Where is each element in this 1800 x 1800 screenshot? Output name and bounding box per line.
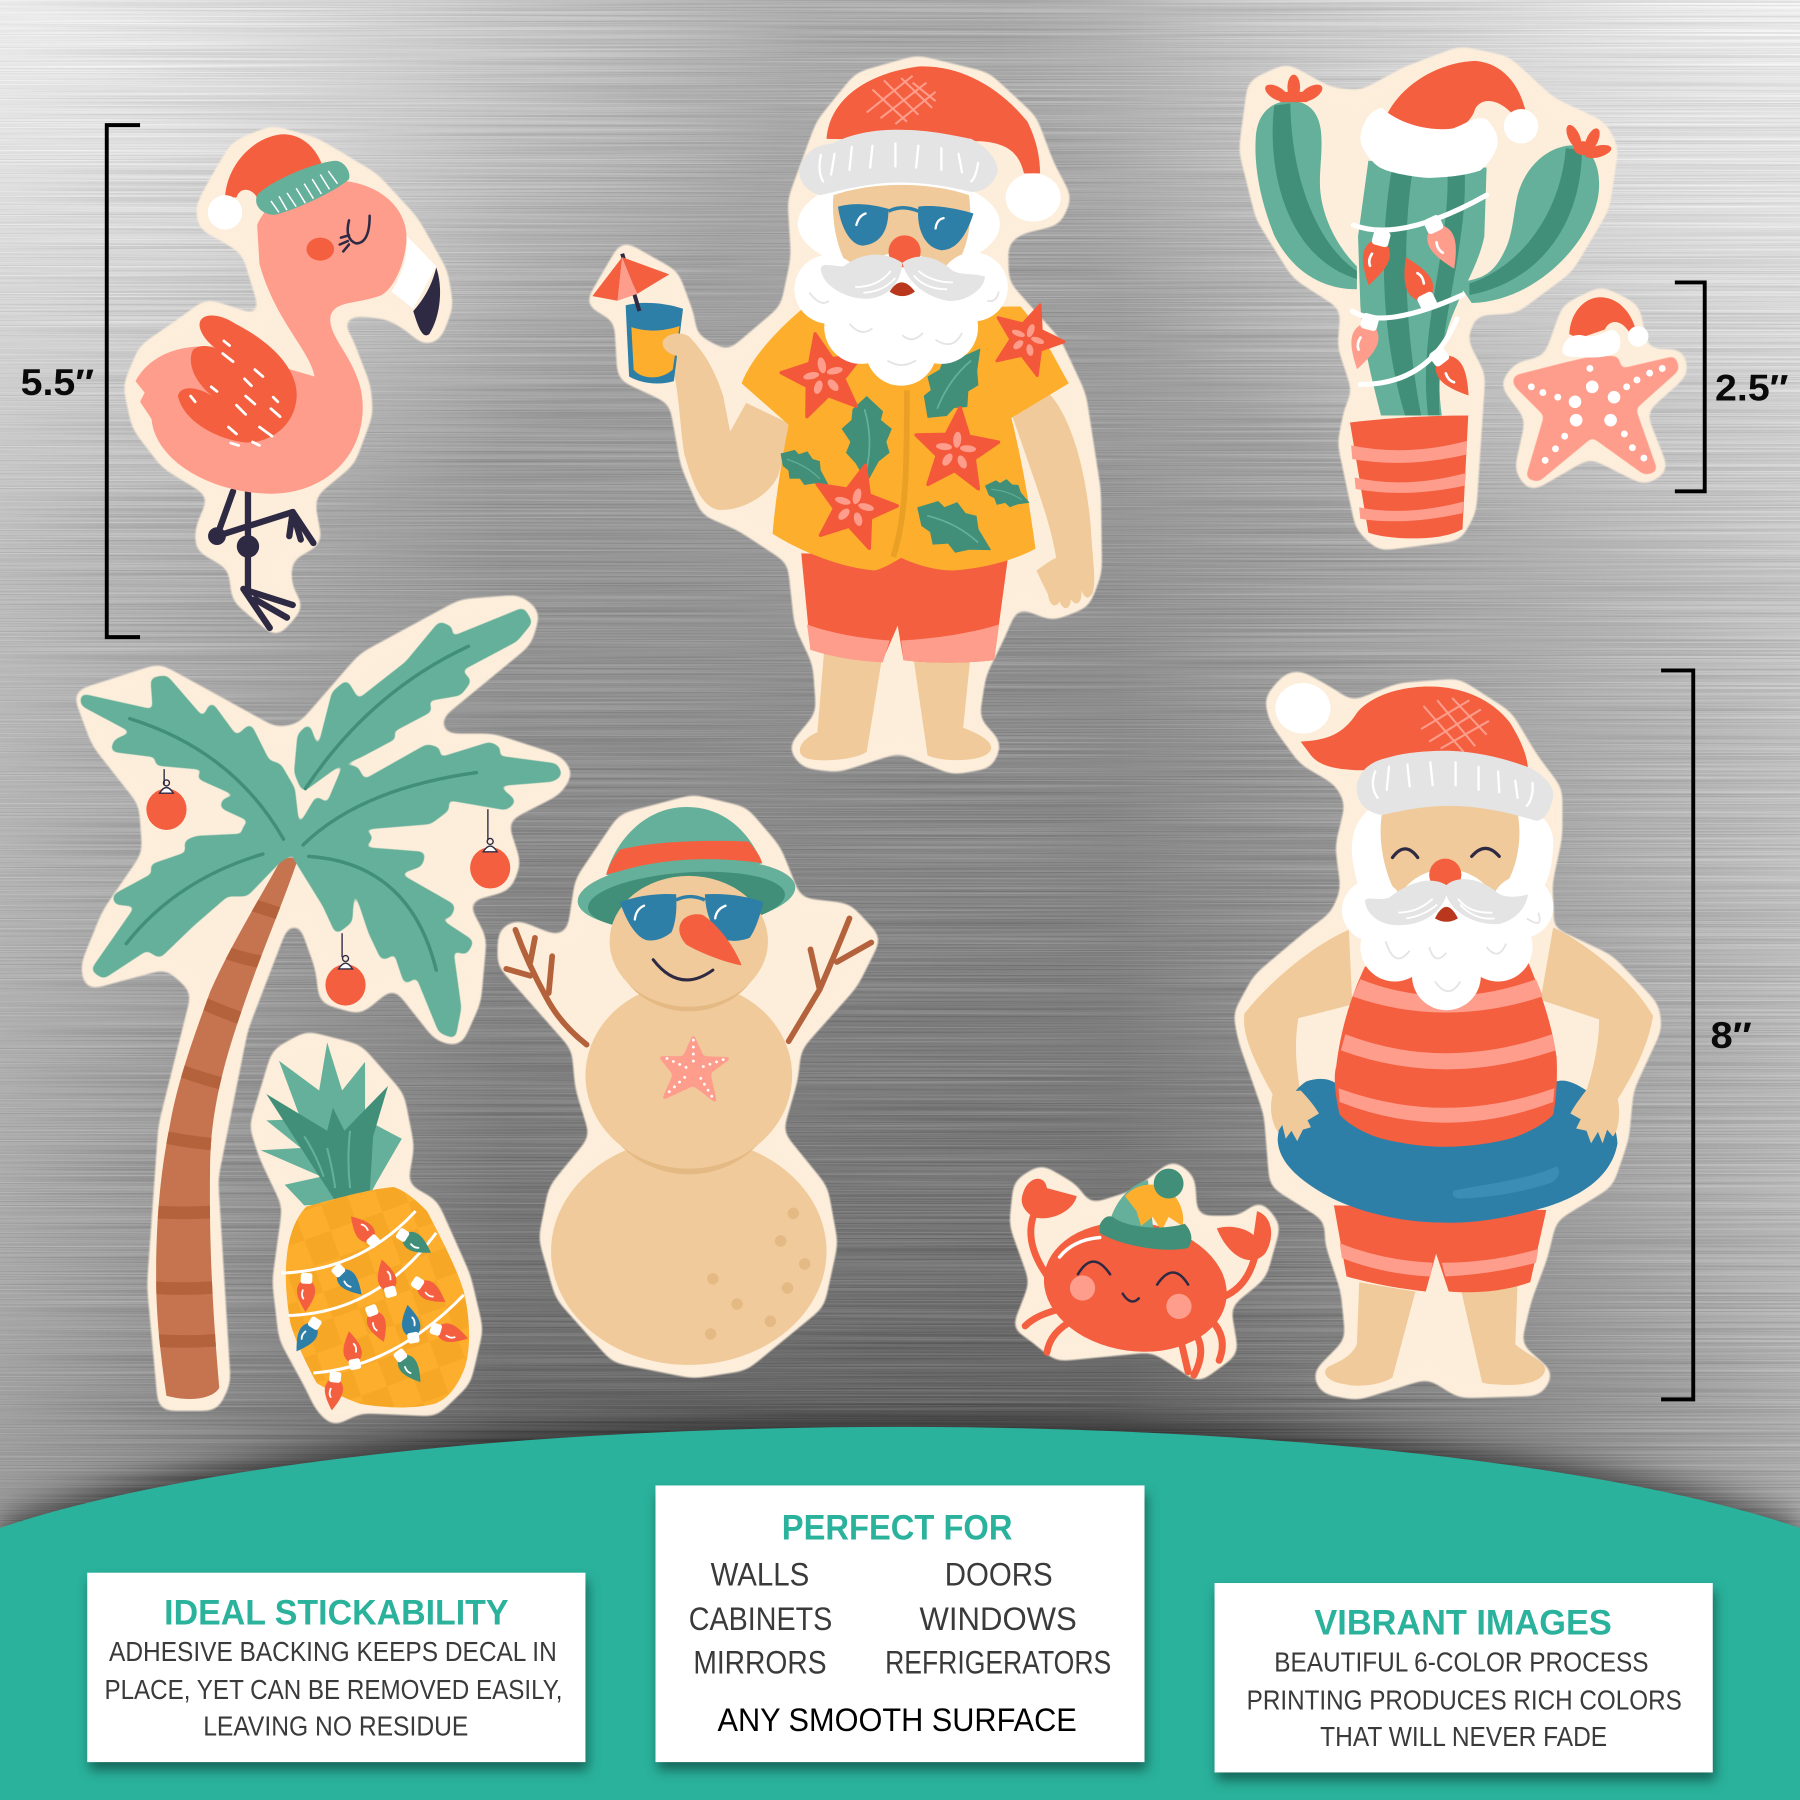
dimension: 2.5 inch <box>1675 282 1789 491</box>
palm die-cut border <box>73 596 573 1410</box>
body text: adhesive backing: ADHESIVE BACKING KEEPS DECAL IN <box>109 1636 557 1667</box>
palm ornaments <box>146 769 510 1006</box>
surface list <box>689 1556 1111 1681</box>
palm frond veins <box>126 646 476 970</box>
surface list: REFRIGERATORS <box>885 1645 1111 1681</box>
snowman bottom ball <box>551 1138 827 1365</box>
santa arms <box>662 333 792 510</box>
sticker: cactus with santa hat <box>1240 47 1617 550</box>
snowman head <box>614 878 763 1011</box>
santa nose, mouth, moustache <box>1365 859 1540 991</box>
santa shorts <box>1334 1205 1546 1292</box>
starfish hat <box>1569 297 1636 339</box>
sticker: santa with swim ring <box>1234 672 1661 1399</box>
sticker: starfish with santa hat <box>1500 287 1688 491</box>
pineapple bulbs <box>289 1210 471 1411</box>
starfish die-cut border <box>1500 287 1688 491</box>
santa hat <box>827 66 1040 173</box>
flamingo beak <box>391 235 436 309</box>
santa shirt <box>742 307 1069 571</box>
santa beard <box>794 253 1008 386</box>
body text: printing <box>1247 1646 1682 1752</box>
santa legs <box>1325 1282 1545 1386</box>
santa sunglasses <box>838 204 973 250</box>
snowman die-cut border <box>498 796 880 1378</box>
surface list: DOORS <box>945 1556 1053 1592</box>
sand dots <box>705 1208 810 1340</box>
santa arms <box>1244 930 1352 1095</box>
santa shorts <box>801 553 1008 663</box>
snowman carrot nose <box>679 914 742 965</box>
body text: adhesive backing: PLACE, YET CAN BE REMOVED EASILY, <box>104 1674 562 1705</box>
flamingo die-cut border <box>124 126 452 637</box>
shirt holly leaves <box>772 333 1034 571</box>
cactus pot <box>1350 416 1468 538</box>
dimension: 8 inch <box>1661 670 1752 1399</box>
ring highlight <box>1453 1166 1559 1198</box>
teal footer band <box>0 1427 1800 1800</box>
snowman sunglasses <box>620 894 763 941</box>
cactus right arm <box>1458 145 1599 303</box>
crab legs and claws <box>1025 1217 1257 1375</box>
santa legs <box>800 650 991 760</box>
santa face <box>833 185 970 276</box>
panel: ideal stickability <box>87 1573 585 1762</box>
sticker: pineapple <box>250 1032 482 1426</box>
santa beard <box>1342 869 1553 1010</box>
dimension: 2.5 inch: 2.5″ <box>1715 368 1789 409</box>
body text: adhesive backing: LEAVING NO RESIDUE <box>203 1711 468 1742</box>
santa die-cut border <box>1234 672 1661 1399</box>
snowman starfish <box>658 1033 732 1104</box>
snowman hat <box>575 807 798 937</box>
surface list: CABINETS <box>689 1601 832 1637</box>
surface list: WALLS <box>711 1556 809 1592</box>
flamingo hat <box>225 134 321 207</box>
dimension: 5.5 inch: 5.5″ <box>21 362 94 403</box>
cactus flowers <box>1262 75 1613 161</box>
santa nose, mouth, moustache <box>809 235 999 365</box>
body text: printing: THAT WILL NEVER FADE <box>1320 1721 1607 1752</box>
santa face <box>1381 803 1519 898</box>
heading: vibrant images: VIBRANT IMAGES <box>1314 1603 1612 1643</box>
flamingo body <box>135 180 407 494</box>
cactus die-cut border <box>1240 47 1617 550</box>
shirt flowers <box>775 293 1073 552</box>
heading: ideal stickability: IDEAL STICKABILITY <box>164 1592 509 1632</box>
dimension: 8 inch: 8″ <box>1710 1015 1752 1056</box>
crab die-cut border <box>1010 1161 1280 1382</box>
flamingo face <box>340 216 370 251</box>
sticker: santa with drink <box>585 56 1101 774</box>
cactus trunk <box>1358 161 1487 416</box>
crab hat <box>1100 1169 1191 1250</box>
santa hair <box>1352 802 1553 907</box>
panel: vibrant images <box>1215 1583 1713 1772</box>
santa die-cut border <box>585 56 1101 774</box>
pineapple die-cut border <box>250 1032 482 1426</box>
pineapple body <box>286 1187 469 1407</box>
flamingo wing <box>178 316 297 442</box>
santa hat fur <box>799 130 998 195</box>
cactus bulbs <box>1344 212 1479 404</box>
heading: perfect for: PERFECT FOR <box>782 1507 1013 1547</box>
dimension: 5.5 inch <box>21 125 140 637</box>
body text: printing: PRINTING PRODUCES RICH COLORS <box>1247 1684 1682 1715</box>
any smooth surface: ANY SMOOTH SURFACE <box>717 1702 1077 1738</box>
crab cheeks and face <box>1060 1238 1192 1319</box>
pineapple light strings <box>281 1211 464 1373</box>
surface list: WINDOWS <box>920 1601 1077 1637</box>
cactus santa hat <box>1387 61 1526 135</box>
sticker: crab <box>1010 1161 1280 1382</box>
santa hat fur <box>1357 751 1553 821</box>
drink with umbrella <box>592 254 689 384</box>
snowman body shadow and middle ball <box>595 988 783 1174</box>
cactus light strings <box>1352 195 1487 385</box>
swim ring <box>1278 1079 1617 1223</box>
pineapple leaves <box>261 1042 402 1205</box>
starfish body <box>1514 357 1678 481</box>
palm trunk <box>156 858 297 1399</box>
body text: adhesive backing <box>104 1636 562 1742</box>
body text: printing: BEAUTIFUL 6-COLOR PROCESS <box>1274 1646 1648 1677</box>
wing feather marks <box>191 341 280 445</box>
sticker: flamingo <box>124 126 452 637</box>
sticker: sand snowman <box>498 796 880 1378</box>
flamingo legs <box>211 491 313 628</box>
surface list: MIRRORS <box>693 1645 827 1681</box>
snowman stick arms <box>506 918 871 1045</box>
cactus left arm <box>1255 101 1357 289</box>
snowman smile <box>653 960 713 980</box>
santa striped top <box>1335 956 1557 1147</box>
santa hands <box>1271 1088 1619 1143</box>
panel: perfect for <box>655 1485 1145 1762</box>
crab body <box>1035 1210 1235 1363</box>
sticker: palm tree <box>73 596 573 1410</box>
santa hat <box>1301 686 1528 770</box>
santa hair <box>798 176 1000 272</box>
palm fronds <box>82 608 561 1038</box>
starfish dots <box>1528 365 1666 464</box>
